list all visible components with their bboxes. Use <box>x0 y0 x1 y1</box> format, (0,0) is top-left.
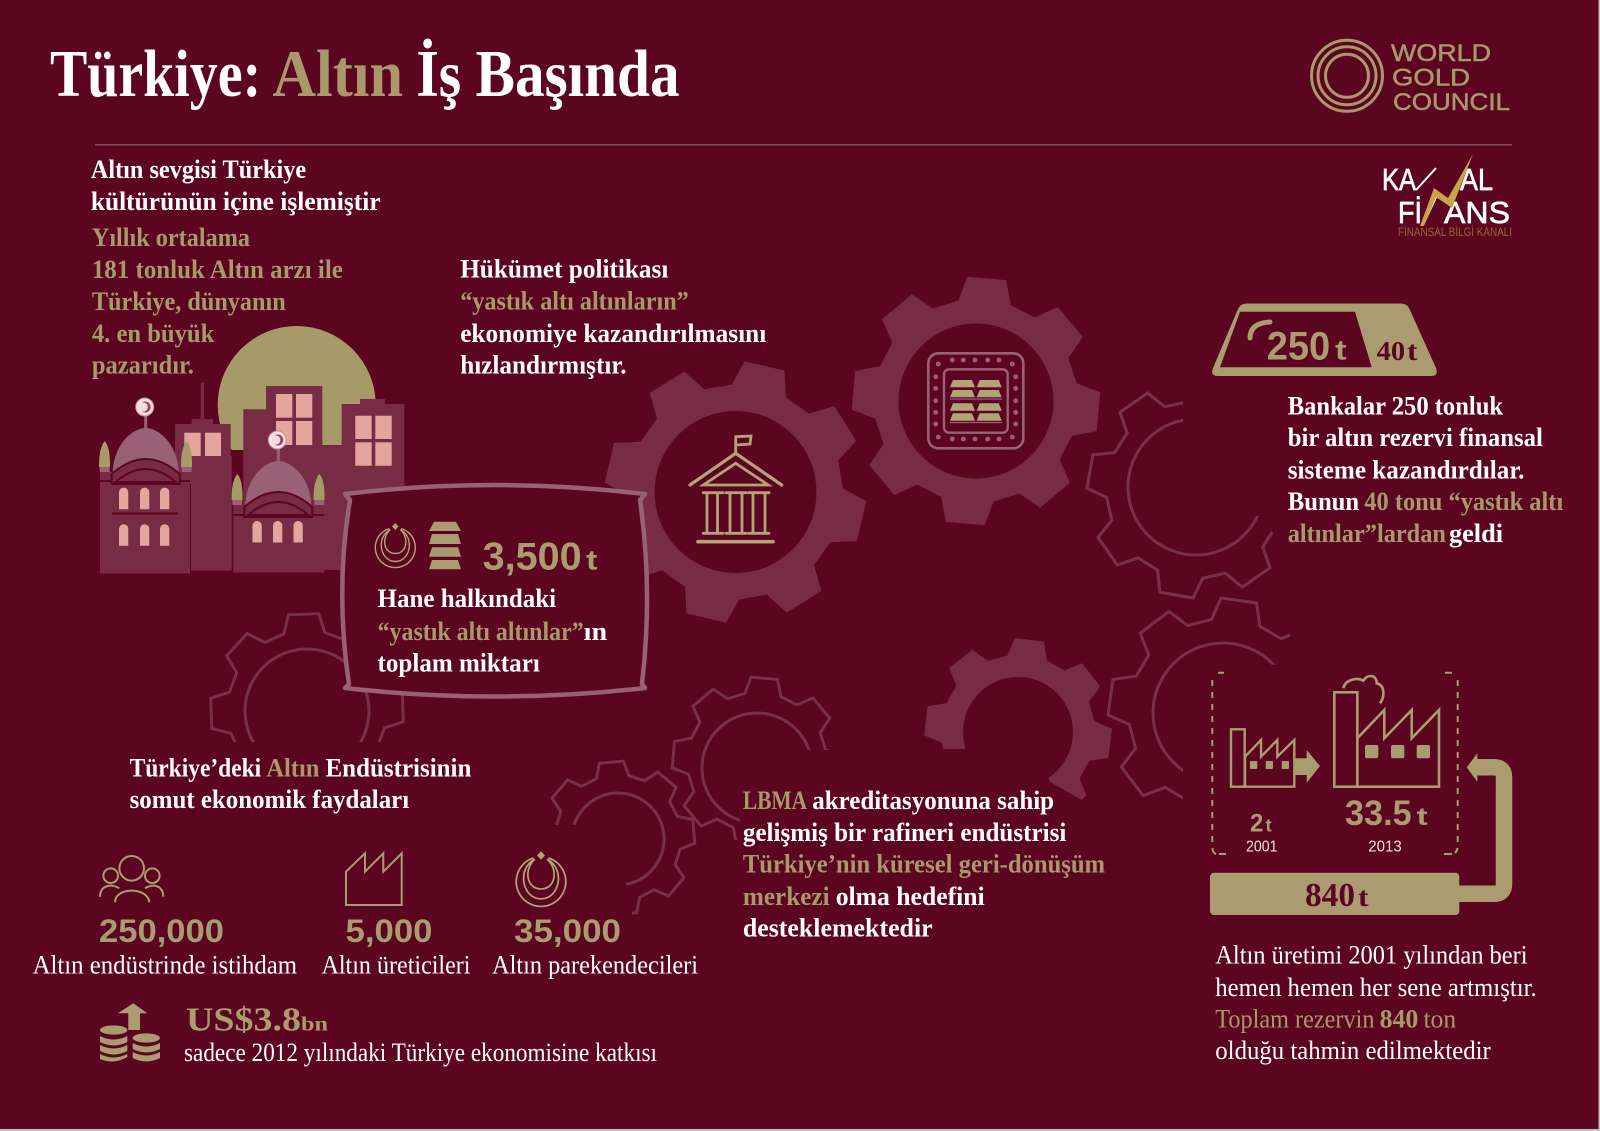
chart: gold production 2001 to 2013 <box>1210 673 1504 915</box>
bar: 840t <box>1210 873 1459 915</box>
logo: World Gold Council: WORLD <box>1391 40 1491 67</box>
icon: people <box>100 856 163 902</box>
icon: factory outline <box>346 853 402 905</box>
stat: producers: 5,000 <box>346 913 432 949</box>
icon: gold bar 250t 40t: 40 <box>1377 336 1405 366</box>
stat: US$3.8bn contribution: sadece 2012 yılındaki Türkiye ekonomisine katkısı <box>184 1038 657 1067</box>
text block: production: olduğu tahmin edilmektedir <box>1215 1035 1491 1065</box>
text block: government policy: “yastık altı altınların” <box>460 286 689 316</box>
text block: LBMA refinery: Türkiye’nin küresel geri-dönüşüm <box>743 848 1105 878</box>
text block: banks reserves: bir altın rezervi finansal <box>1288 422 1543 452</box>
text block: production: Altın üretimi 2001 yılından beri <box>1215 939 1528 969</box>
text block: LBMA refinery: LBMA <box>743 785 807 815</box>
text: household gold: toplam miktarı <box>378 647 540 677</box>
figure: 2t 2001: 2001 <box>1246 839 1278 856</box>
icon: government building <box>690 436 782 542</box>
icon: gold bar 250t 40t <box>1212 304 1437 376</box>
figure: 33.5t 2013: 2013 <box>1368 839 1402 856</box>
stat: US$3.8bn contribution <box>100 1002 657 1067</box>
gear: outline centre bottom <box>670 676 832 840</box>
icon: coins with arrow <box>100 1003 160 1062</box>
text block: banks reserves: Bunun <box>1288 486 1359 516</box>
icon: gold bar 250t 40t: t <box>1407 336 1418 366</box>
panel: gear with government building <box>580 337 891 647</box>
stat: producers: Altın üreticileri <box>322 950 470 980</box>
icon: gold bar 250t 40t: 250 <box>1267 325 1330 369</box>
title <box>50 38 680 111</box>
stat: employment: Altın endüstrinde istihdam <box>33 950 297 980</box>
heading: economic benefits <box>130 753 472 814</box>
text block: LBMA refinery <box>743 785 1105 943</box>
text block: LBMA refinery: desteklemektedir <box>743 913 933 943</box>
panel: gear with vault <box>843 268 1109 534</box>
mosque: left <box>99 398 192 574</box>
text: household gold <box>378 583 607 677</box>
heading: economic benefits: somut ekonomik faydaları <box>130 784 409 814</box>
illustration: Istanbul skyline <box>99 326 404 574</box>
stat: producers <box>322 853 470 980</box>
bracket: dashed <box>1212 673 1458 854</box>
text block: production: 840 <box>1380 1004 1418 1034</box>
icon: large factory <box>1334 676 1439 787</box>
text block: government policy: ekonomiye kazandırılmasını <box>460 318 766 348</box>
text: household gold: “yastık altı altınlar” <box>378 616 584 646</box>
text: household gold: ın <box>584 616 607 646</box>
text block: banks reserves <box>1288 390 1563 548</box>
icon: gold bars <box>429 522 461 569</box>
bar: 840t: t <box>1358 882 1368 912</box>
text block: LBMA refinery: akreditasyonuna sahip <box>812 785 1054 815</box>
logo: World Gold Council: COUNCIL <box>1393 89 1510 116</box>
gear: outline behind bank text <box>1085 391 1273 600</box>
logo: Kanal Finans: KA <box>1382 162 1416 197</box>
text block: banks reserves: sisteme kazandırdılar. <box>1288 455 1524 485</box>
text block: production: ton <box>1423 1004 1456 1034</box>
logo: Kanal Finans: FİNANSAL BİLGİ KANALI <box>1398 226 1512 239</box>
text block: gold culture: 4. en büyük <box>92 318 215 348</box>
title: Altın <box>272 38 403 111</box>
icon: gold bar 250t 40t: t <box>1335 335 1346 366</box>
logo: Kanal Finans <box>1382 154 1512 239</box>
logo: Kanal Finans: Fİ <box>1398 195 1422 230</box>
figure: 3,500t: t <box>586 544 598 575</box>
icon: gold vault <box>928 353 1023 448</box>
title: İş <box>416 38 461 111</box>
panel: household gold box <box>342 485 647 696</box>
text block: gold culture: Türkiye, dünyanın <box>92 286 286 316</box>
figure: 33.5t 2013 <box>1345 794 1429 856</box>
figure: 2t 2001 <box>1246 810 1278 856</box>
text block: banks reserves: 40 tonu “yastık altı <box>1364 486 1563 516</box>
text block: production: hemen hemen her sene artmıştır. <box>1215 972 1537 1002</box>
gear: outline above retailers <box>550 760 696 914</box>
figure: 2t 2001: t <box>1266 816 1272 836</box>
figure: 33.5t 2013: t <box>1417 803 1429 831</box>
text block: gold culture <box>91 154 381 379</box>
text block: LBMA refinery: merkezi <box>743 881 830 911</box>
text block: banks reserves: Bankalar 250 tonluk <box>1288 390 1503 420</box>
logo: World Gold Council: GOLD <box>1392 64 1470 92</box>
mosque: right <box>232 431 325 572</box>
text block: gold culture: pazarıdır. <box>92 349 194 379</box>
heading: economic benefits: Endüstrisinin <box>326 753 472 783</box>
stat: retailers: 35,000 <box>514 913 621 949</box>
text block: banks reserves: altınlar”lardan <box>1288 518 1446 548</box>
text block: LBMA refinery: olma hedefini <box>836 881 985 911</box>
figure: 3,500t: 3,500 <box>483 535 582 578</box>
text block: LBMA refinery: gelişmiş bir rafineri endüstrisi <box>743 817 1066 847</box>
figure: 2t 2001: 2 <box>1250 810 1263 838</box>
logo: Kanal Finans: AL <box>1460 162 1493 197</box>
stat: US$3.8bn contribution: US$3.8 <box>186 1002 301 1038</box>
text block: gold culture: 181 tonluk Altın arzı ile <box>92 254 343 284</box>
text block: government policy <box>460 254 766 379</box>
text block: government policy: hızlandırmıştır. <box>460 349 627 379</box>
title: Başında <box>476 38 680 111</box>
title: Türkiye: <box>50 38 261 111</box>
text block: banks reserves: geldi <box>1449 518 1503 548</box>
heading: economic benefits: Altın <box>266 753 320 783</box>
logo: Kanal Finans: ANS <box>1444 195 1510 230</box>
text block: production: Toplam rezervin <box>1215 1004 1374 1034</box>
text block: government policy: Hükümet politikası <box>460 254 668 284</box>
stat: US$3.8bn contribution: bn <box>301 1014 328 1036</box>
gear: outline behind household box <box>209 612 405 742</box>
figure: 33.5t 2013: 33.5 <box>1345 794 1412 833</box>
icon: small factory <box>1231 729 1294 787</box>
logo: World Gold Council <box>1312 40 1510 116</box>
text: household gold: Hane halkındaki <box>378 583 556 613</box>
gear: filled refinery <box>924 638 1112 800</box>
stat: retailers <box>492 851 698 980</box>
stat: employment <box>33 856 297 980</box>
text block: gold culture: Altın sevgisi Türkiye <box>91 154 306 184</box>
arrow: reserve feed back <box>1455 753 1504 894</box>
text block: gold culture: Yıllık ortalama <box>92 222 250 252</box>
icon: necklace large <box>516 851 566 906</box>
bar: 840t: 840 <box>1305 877 1355 914</box>
stat: employment: 250,000 <box>99 913 224 949</box>
text block: production <box>1215 939 1537 1065</box>
text block: gold culture: kültürünün içine işlemiştir <box>91 186 381 216</box>
heading: economic benefits: Türkiye’deki <box>130 753 261 783</box>
icon: necklace <box>375 523 415 568</box>
gear: outline above production <box>1106 596 1290 800</box>
stat: retailers: Altın parekendecileri <box>492 950 698 980</box>
